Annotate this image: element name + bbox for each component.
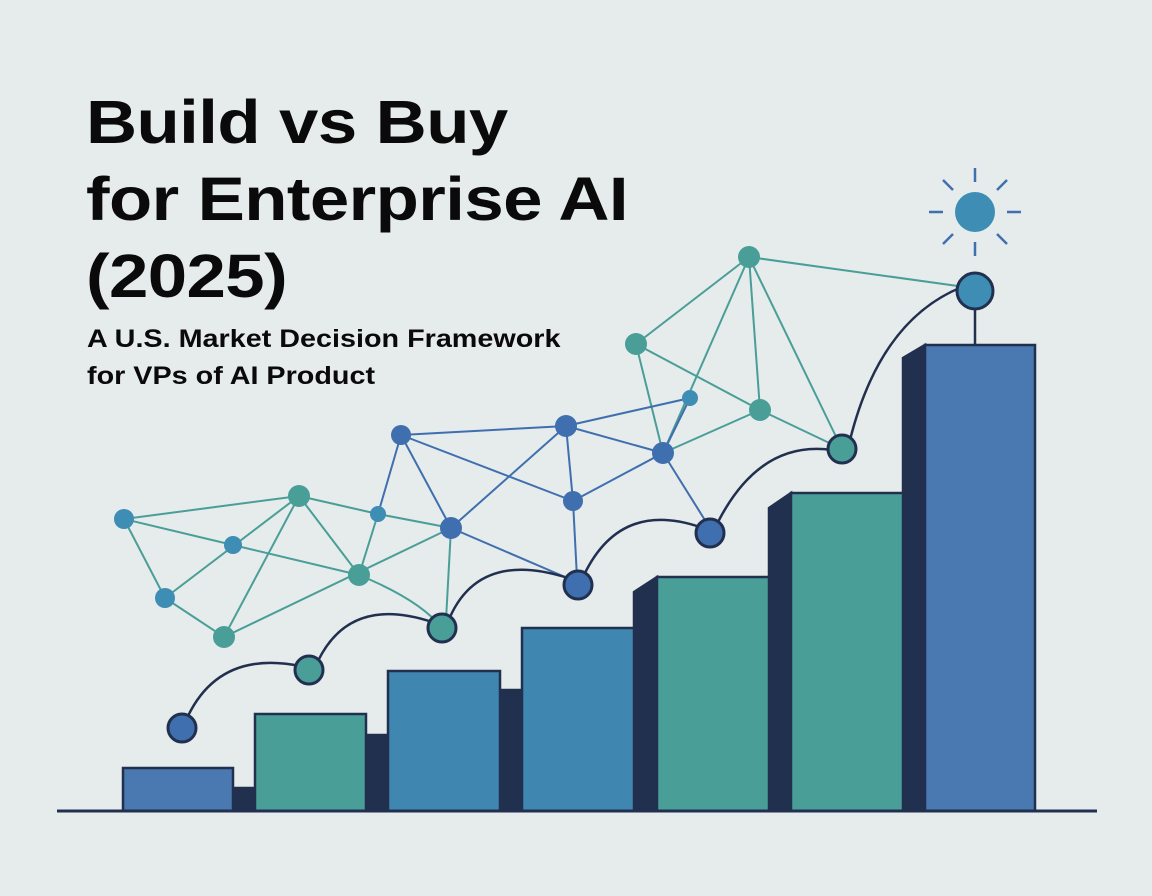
growth nodes [168, 273, 993, 742]
growth path [188, 287, 975, 716]
baseline [57, 810, 1097, 812]
bars [123, 345, 1035, 811]
network nodes [114, 246, 771, 648]
title [86, 88, 628, 310]
title: Build vs Buy [86, 88, 508, 156]
subtitle [87, 325, 560, 390]
subtitle: A U.S. Market Decision Framework [87, 325, 560, 353]
title: for Enterprise AI [86, 165, 628, 233]
subtitle: for VPs of AI Product [87, 362, 375, 390]
network graph [124, 257, 965, 637]
icon: sun [929, 168, 1021, 256]
title: (2025) [86, 242, 287, 310]
